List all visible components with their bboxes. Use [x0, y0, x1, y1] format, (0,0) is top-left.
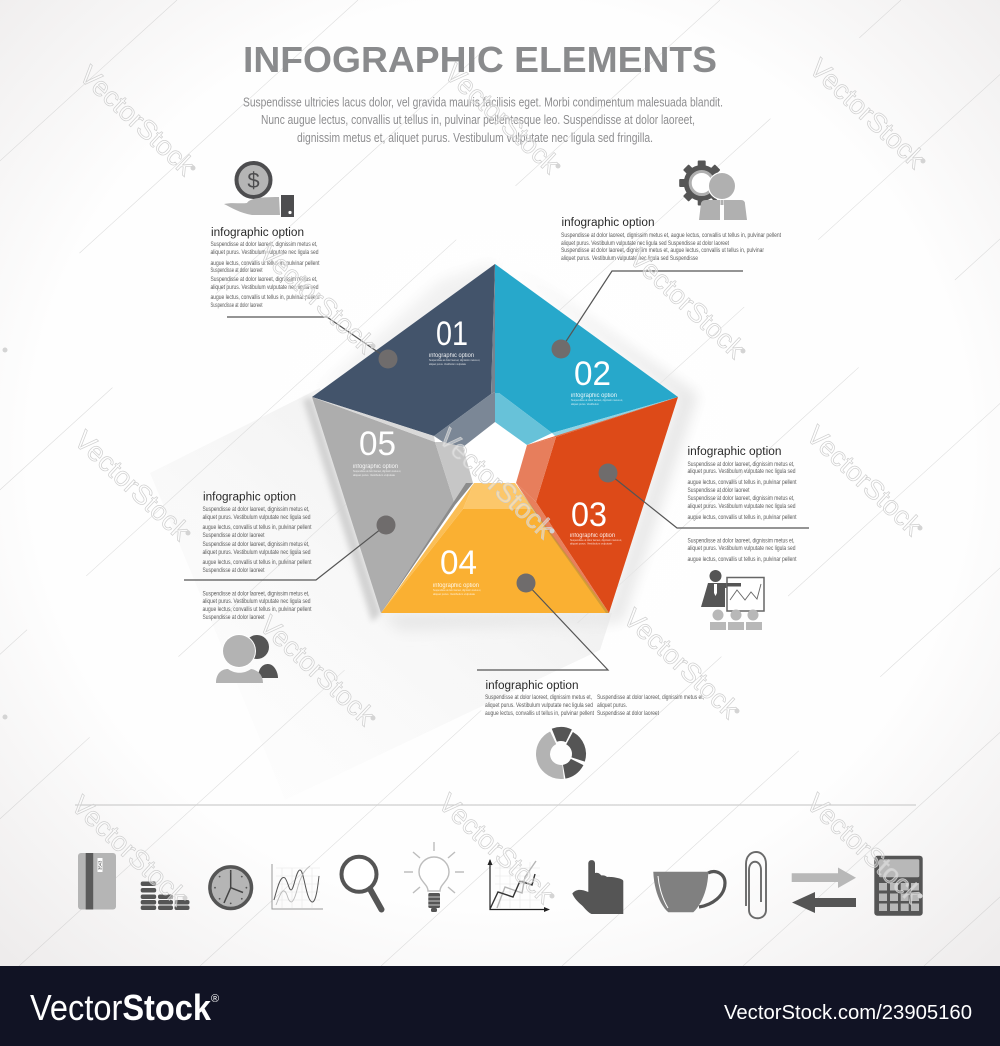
- pentagon diagram: [312, 264, 678, 613]
- caption 04: aliquet purus. Vestibulum vulputate: [433, 592, 475, 596]
- caption 05: Suspendisse at dolor laoreet, dignissim metus et,: [353, 469, 401, 473]
- watermarks: VectorStock: [433, 423, 560, 545]
- caption 02: infographic option: [571, 393, 617, 399]
- text block: option 04: Suspendisse at dolor laoreet, dignissim metus et,: [485, 694, 592, 701]
- number 03: 03: [571, 496, 607, 534]
- caption 03: aliquet purus. Vestibulum vulputate: [570, 542, 612, 546]
- icon: presenter and audience: [701, 570, 764, 630]
- leader line and dot 05: [184, 516, 396, 580]
- caption 01: aliquet purus. Vestibulum vulputate: [429, 362, 466, 366]
- caption 01: Suspendisse at dolor laoreet, dignissim metus et,: [429, 358, 480, 362]
- text block: option 05: aliquet purus. Vestibulum vulputate nec ligula sed: [202, 598, 311, 605]
- leader line and dot 01: [227, 317, 398, 368]
- segment 03: [516, 397, 678, 613]
- leader line and dot 03: [598, 464, 809, 528]
- icon: donut chart: [536, 729, 586, 779]
- watermarks: VectorStock: [69, 425, 196, 547]
- number 01: 01: [436, 315, 468, 353]
- icon: credit card: 3543: [98, 860, 102, 870]
- text block: option 05: aliquet purus. Vestibulum vulputate nec ligula sed: [202, 514, 311, 521]
- text block: option 02: Suspendisse at dolor laoreet, dignissim metus et, augue lectus, convallis ut tellus in, pulvinar pellent: [561, 232, 781, 239]
- text block: option 04: augue lectus, convallis ut tellus in, pulvinar pellent: [485, 710, 594, 717]
- caption 04: infographic option: [433, 583, 479, 589]
- text block: option 03: aliquet purus. Vestibulum vulputate nec ligula sed: [688, 503, 796, 510]
- divider: [75, 804, 916, 806]
- text block: option 03: augue lectus, convallis ut tellus in, pulvinar pellent: [688, 514, 797, 521]
- text block: option 03: augue lectus, convallis ut tellus in, pulvinar pellent: [688, 556, 797, 563]
- watermarks: VectorStock: [624, 243, 751, 365]
- watermarks: VectorStock: [618, 603, 745, 725]
- icon: paper clip: [746, 852, 766, 918]
- icon: gear and person: [679, 160, 747, 220]
- text block: option 02: infographic option: [562, 217, 654, 229]
- watermarks: VectorStock: [433, 788, 560, 910]
- caption 02: Suspendisse at dolor laoreet, dignissim metus et,: [571, 398, 623, 402]
- text block: option 03: Suspendisse at dolor laoreet: [688, 487, 750, 494]
- intro paragraph: Suspendisse ultricies lacus dolor, vel gravida mauris facilisis eget. Morbi condimentum malesuada blandit.: [243, 94, 723, 110]
- segment 04: [381, 483, 609, 613]
- text block: option 01: augue lectus, convallis ut tellus in, pulvinar pellent: [210, 260, 320, 267]
- text block: option 01: infographic option: [211, 227, 304, 239]
- footer band: [0, 966, 1000, 1046]
- caption 01: [429, 353, 480, 366]
- long shadow behind pentagon: [150, 262, 698, 800]
- text block: option 02: aliquet purus. Vestibulum vulputate nec ligula sed Suspendisse: [561, 255, 698, 262]
- intro paragraph: Nunc augue lectus, convallis ut tellus in, pulvinar pellentesque leo. Suspendisse at dolor laoreet,: [261, 112, 695, 127]
- icon: hand holding coin: [224, 163, 294, 217]
- icon: two people: [216, 634, 278, 683]
- text block: option 03: Suspendisse at dolor laoreet, dignissim metus et,: [688, 538, 795, 544]
- text block: option 05: Suspendisse at dolor laoreet: [202, 567, 265, 574]
- text block: option 02: aliquet purus. Vestibulum vulputate nec ligula sed Suspendisse at dolor laoreet: [561, 240, 729, 247]
- text block: option 01: aliquet purus. Vestibulum vulputate nec ligula sed: [210, 284, 319, 291]
- intro paragraph: [243, 94, 723, 145]
- caption 05: infographic option: [353, 464, 398, 470]
- caption 01: infographic option: [429, 353, 474, 359]
- text block: option 01: Suspendisse at dolor laoreet, dignissim metus et,: [210, 276, 318, 283]
- text block: option 05: Suspendisse at dolor laoreet: [202, 614, 265, 621]
- footer registered mark: ®: [211, 993, 219, 1005]
- footer logo: VectorStock: [30, 987, 212, 1028]
- caption 05: aliquet purus. Vestibulum vulputate: [353, 473, 395, 477]
- icon: magnifying glass: [342, 857, 382, 910]
- watermarks: VectorStock: [439, 58, 566, 180]
- number 04: 04: [440, 544, 477, 582]
- caption 03: [570, 533, 622, 546]
- text block: option 02: [561, 217, 781, 262]
- segment 02: [495, 264, 678, 445]
- watermarks: VectorStock: [74, 60, 201, 182]
- caption 03: infographic option: [570, 533, 615, 539]
- icon: coin stacks: [141, 882, 190, 910]
- text block: option 05: Suspendisse at dolor laoreet, dignissim metus et,: [202, 506, 310, 513]
- footer image id: VectorStock.com/23905160: [724, 1002, 972, 1024]
- text block: option 03: Suspendisse at dolor laoreet, dignissim metus et,: [688, 495, 795, 502]
- segment 05: [312, 397, 473, 613]
- text block: option 03: aliquet purus. Vestibulum vulputate nec ligula sed: [688, 545, 796, 552]
- text block: option 05: Suspendisse at dolor laoreet: [202, 532, 265, 539]
- text block: option 01: Suspendisse at dolor laoreet, dignissim metus et,: [210, 241, 318, 248]
- icon: hand holding coin: $: [247, 168, 260, 193]
- icon: calculator: [874, 856, 923, 916]
- text block: option 04: Suspendisse at dolor laoreet: [597, 710, 659, 717]
- watermarks: VectorStock: [254, 610, 381, 732]
- caption 02: [571, 393, 623, 406]
- text block: option 01: [210, 227, 320, 309]
- text block: option 01: Suspendisse at dolor laoreet: [210, 267, 263, 274]
- text block: option 05: Suspendisse at dolor laoreet, dignissim metus et,: [202, 590, 310, 598]
- number 02: 02: [574, 355, 611, 393]
- text block: option 04: aliquet purus.: [597, 702, 627, 709]
- text block: option 05: augue lectus, convallis ut tellus in, pulvinar pellent: [202, 606, 312, 613]
- leader line and dot 02: [552, 271, 743, 358]
- text block: option 01: aliquet purus. Vestibulum vulputate nec ligula sed: [210, 249, 319, 256]
- watermarks: [2, 53, 931, 912]
- caption 05: [353, 464, 401, 477]
- icon: credit card: [78, 853, 116, 910]
- text block: option 03: Suspendisse at dolor laoreet, dignissim metus et,: [688, 461, 795, 468]
- text block: option 03: infographic option: [688, 446, 782, 458]
- segment 01: [312, 264, 495, 447]
- icon: exchange arrows: [792, 868, 856, 913]
- text block: option 03: [688, 446, 797, 563]
- text block: option 05: augue lectus, convallis ut tellus in, pulvinar pellent: [202, 559, 312, 566]
- text block: option 04: [485, 680, 704, 717]
- icon: line chart: [488, 859, 550, 912]
- text block: option 03: augue lectus, convallis ut tellus in, pulvinar pellent: [688, 479, 797, 486]
- text block: option 05: [202, 492, 312, 621]
- icon: wave chart: [272, 864, 323, 909]
- text block: option 05: Suspendisse at dolor laoreet, dignissim metus et,: [202, 541, 310, 548]
- icon: light bulb: [404, 842, 464, 912]
- text block: option 04: aliquet purus. Vestibulum vulputate nec ligula sed: [485, 702, 593, 709]
- icon: pointing hand: [572, 860, 623, 914]
- caption 04: [433, 583, 481, 596]
- text block: option 03: aliquet purus. Vestibulum vulputate nec ligula sed: [688, 468, 796, 475]
- watermarks: VectorStock: [801, 420, 928, 542]
- title: INFOGRAPHIC ELEMENTS: [243, 39, 717, 80]
- icon: clock: [210, 867, 252, 908]
- number 05: 05: [359, 425, 396, 463]
- text block: option 01: Suspendisse at dolor laoreet: [210, 302, 263, 309]
- text block: option 02: Suspendisse at dolor laoreet, dignissim metus et, augue lectus, convallis ut tellus in, pulvinar: [561, 247, 764, 254]
- watermarks: VectorStock: [66, 790, 193, 912]
- text block: option 05: augue lectus, convallis ut tellus in, pulvinar pellent: [202, 524, 312, 531]
- caption 04: Suspendisse at dolor laoreet, dignissim metus et,: [433, 588, 481, 592]
- text block: option 04: Suspendisse at dolor laoreet, dignissim metus et,: [597, 694, 704, 701]
- icon: coffee cup: [653, 872, 725, 912]
- caption 03: Suspendisse at dolor laoreet, dignissim metus et,: [570, 538, 622, 542]
- caption 02: aliquet purus. Vestibulum: [571, 402, 599, 406]
- leader line and dot 04: [477, 574, 608, 670]
- intro paragraph: dignissim metus et, aliquet purus. Vestibulum vulputate nec ligula sed fringilla.: [297, 130, 653, 145]
- text block: option 01: augue lectus, convallis ut tellus in, pulvinar pellent: [210, 294, 320, 301]
- watermarks: VectorStock: [801, 788, 928, 910]
- text block: option 05: infographic option: [203, 492, 296, 504]
- watermarks: VectorStock: [804, 53, 931, 175]
- text block: option 05: aliquet purus. Vestibulum vulputate nec ligula sed: [202, 549, 311, 556]
- text block: option 04: infographic option: [486, 680, 578, 692]
- watermarks: VectorStock: [254, 238, 381, 360]
